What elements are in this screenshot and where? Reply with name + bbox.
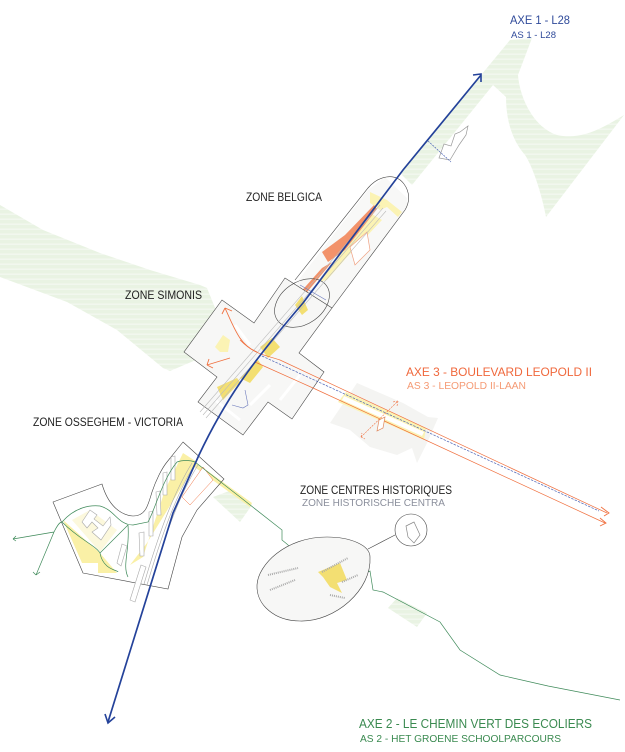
shaft — [108, 75, 481, 722]
rail tracks — [200, 205, 386, 418]
yellow and white bands — [338, 392, 426, 440]
label: as 2: AS 2 - HET GROENE SCHOOLPARCOURS — [360, 734, 561, 745]
green zone: north-east park and corridor — [400, 38, 624, 217]
axis 2 green path: east — [195, 462, 620, 700]
blue details — [232, 285, 326, 408]
axis 3: Boulevard Leopold II — [240, 340, 609, 526]
yellow squares — [215, 335, 230, 352]
label: zone centres historiques: ZONE CENTRES HISTORIQUES — [300, 485, 452, 497]
label: zone Belgica: ZONE BELGICA — [246, 192, 322, 204]
detail circle — [395, 514, 427, 546]
crossing arrows and shelter — [361, 401, 398, 439]
cross outline — [184, 278, 332, 435]
yellow spaces — [318, 192, 402, 282]
label: axe 1: AXE 1 - L28 — [510, 15, 570, 27]
arrow heads — [600, 507, 609, 526]
zone Simonis cross — [184, 205, 386, 435]
label: as 3: AS 3 - LEOPOLD II-LAAN — [407, 381, 526, 392]
orange buildings — [182, 467, 213, 505]
outline — [53, 442, 224, 589]
blob — [257, 537, 370, 621]
white building — [350, 232, 370, 265]
arrow head bottom — [105, 714, 115, 723]
yellow spaces — [63, 453, 252, 573]
connector line — [368, 535, 395, 549]
axis 1 blue arrow — [105, 74, 481, 723]
small block — [117, 544, 127, 566]
zone Osseghem Victoria — [53, 442, 252, 602]
label: zone Simonis: ZONE SIMONIS — [125, 290, 202, 302]
grey urban fabric — [297, 177, 407, 308]
grey urban fabric — [184, 278, 332, 435]
orange upper line — [240, 340, 607, 513]
axis 2 green path: west branches — [13, 460, 195, 577]
orange wedge — [298, 205, 377, 297]
arrow head top — [473, 74, 481, 82]
green patch: near historic centres — [388, 598, 427, 627]
orange side arrows — [207, 308, 257, 368]
label: as 1: AS 1 - L28 — [511, 30, 556, 41]
ellipse — [265, 269, 339, 337]
school buildings — [82, 510, 111, 540]
orange lower line — [255, 362, 605, 523]
bright yellow squares — [217, 296, 308, 400]
station platform — [130, 565, 146, 602]
zone Belgica capsule — [295, 177, 409, 308]
street drawings — [268, 558, 358, 598]
rail tracks — [144, 463, 198, 586]
L28 station building and dashed line — [428, 126, 468, 162]
white tower blocks — [139, 456, 175, 556]
capsule outline — [295, 177, 409, 308]
green zone: left park band — [0, 205, 222, 371]
label: zone historische centra: ZONE HISTORISCHE CENTRA — [302, 497, 445, 509]
yellow square — [318, 563, 347, 593]
label: axe 3: AXE 3 - BOULEVARD LEOPOLD II — [406, 365, 592, 379]
grey building blob: Boulevard Leopold — [330, 383, 438, 463]
white streets — [215, 325, 300, 420]
zone historic centres — [257, 514, 427, 621]
detail building — [406, 522, 420, 543]
label: zone Osseghem Victoria: ZONE OSSEGHEM - VICTORIA — [33, 417, 183, 429]
label: axe 2: AXE 2 - LE CHEMIN VERT DES ECOLIERS — [359, 717, 592, 731]
blue dashed line — [262, 356, 599, 511]
green patch: near zone Osseghem — [213, 490, 252, 522]
